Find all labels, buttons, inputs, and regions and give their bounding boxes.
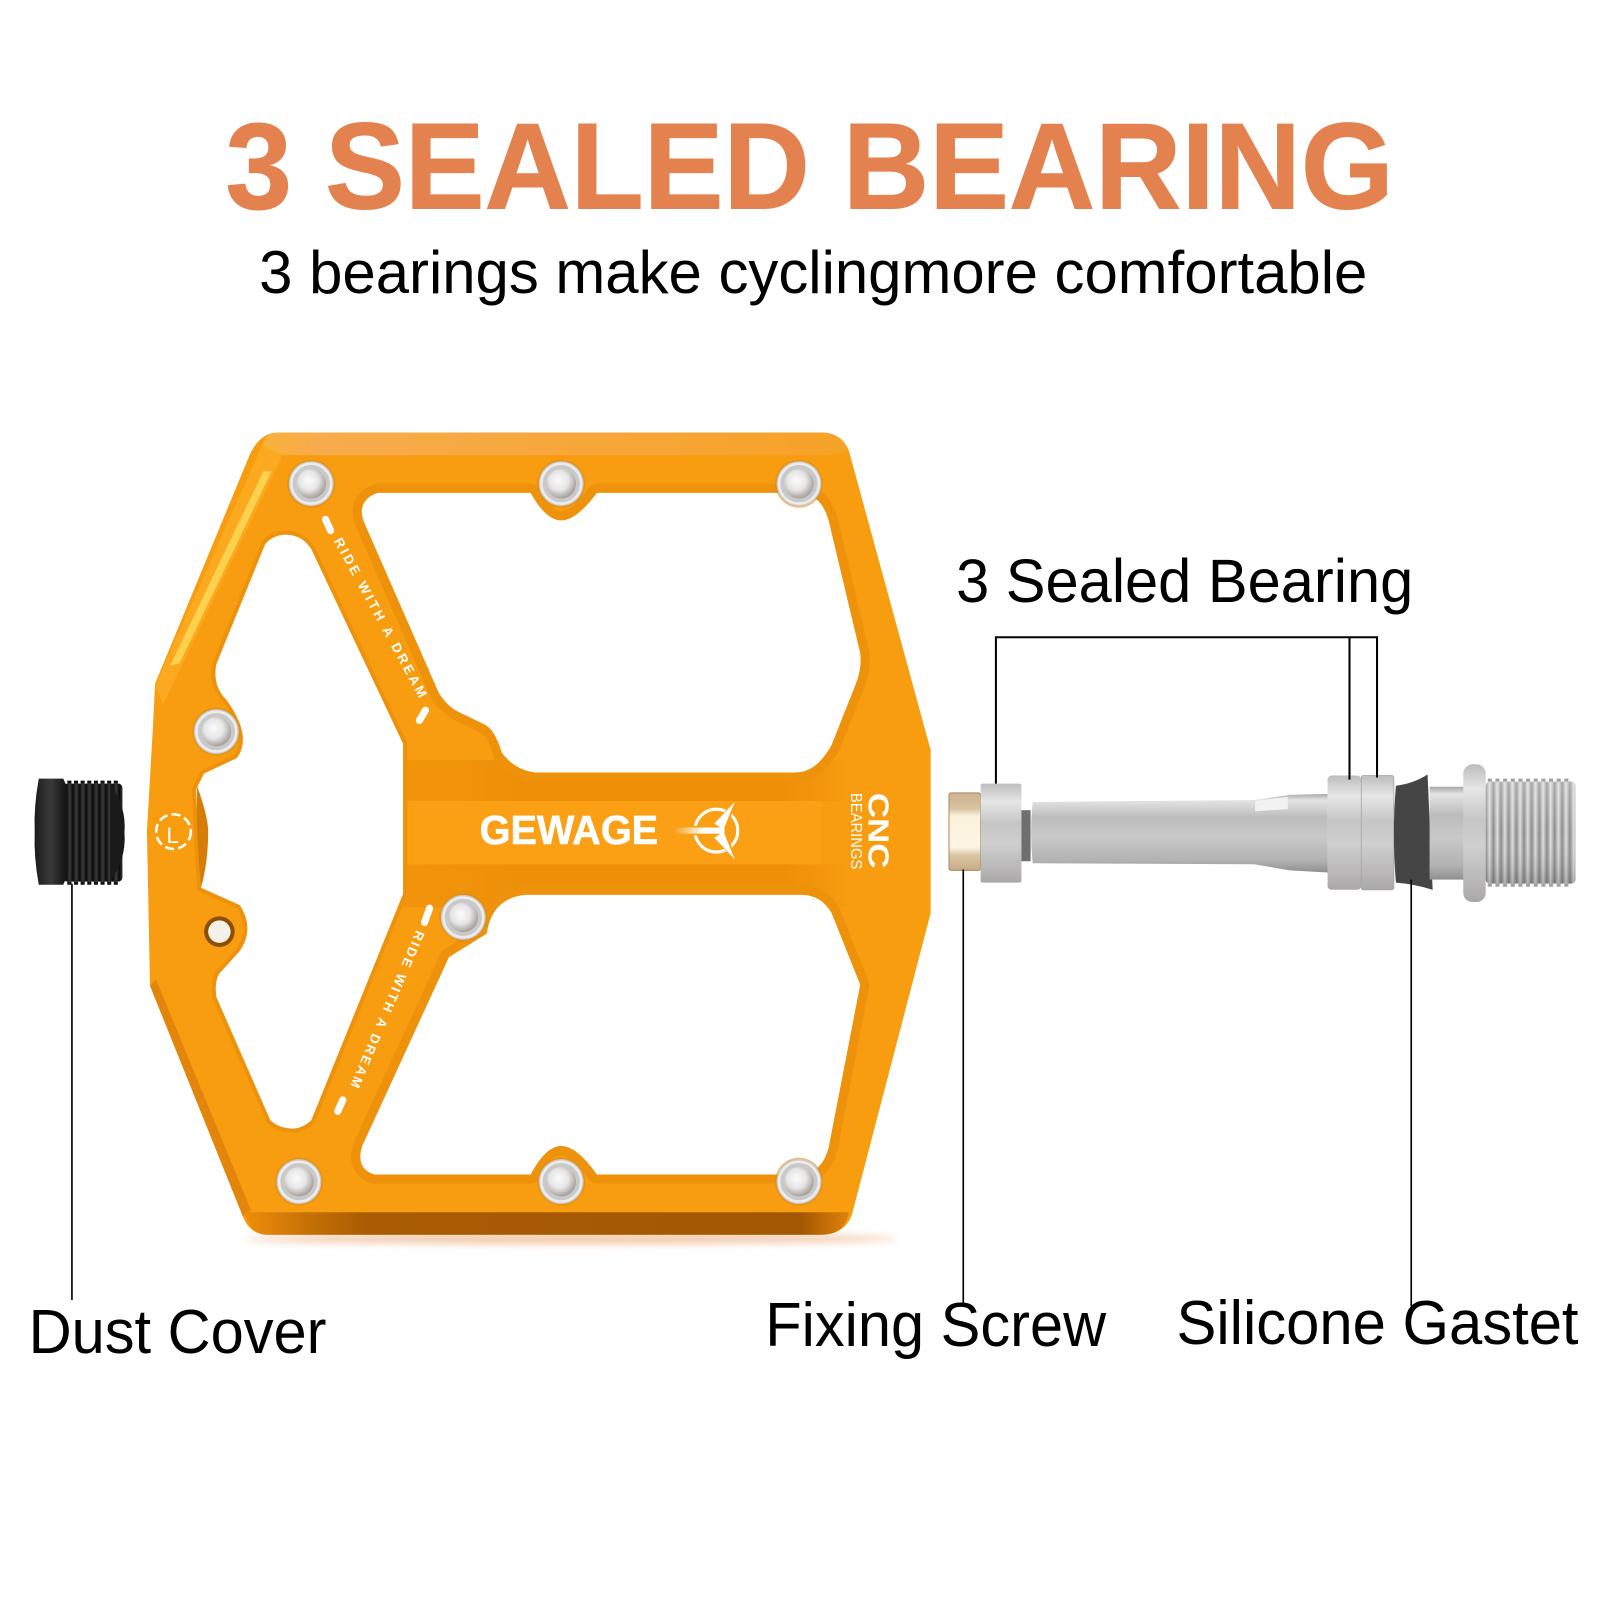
bearing three — [1361, 776, 1394, 890]
lower arm engraving: RIDE WITH A DREAM — [347, 928, 427, 1090]
upper arm engraving: RIDE WITH A DREAM — [331, 535, 430, 700]
mounting bolts — [192, 460, 823, 1206]
pedal body — [147, 433, 931, 1235]
left bevel strip — [155, 445, 283, 704]
dust cover leader line — [71, 884, 73, 1300]
BEARINGS mark: BEARINGS — [847, 793, 864, 869]
label: 3 sealed bearing: 3 Sealed Bearing — [956, 547, 1413, 615]
bearing bracket lines — [996, 637, 1377, 784]
lower window recess and cutout — [360, 895, 860, 1174]
logo plate — [400, 801, 821, 864]
L side mark: L — [166, 823, 179, 848]
bottom bevel — [245, 1212, 849, 1235]
pedal drop shadow — [245, 1234, 898, 1244]
CNC mark: CNC — [861, 793, 893, 868]
fixing screw leader line — [962, 869, 964, 1304]
cover thread teeth — [67, 782, 118, 883]
dust cover — [35, 779, 125, 885]
shaft highlight — [1255, 797, 1288, 811]
axle collar — [1430, 787, 1465, 880]
lower arm engraving — [338, 908, 430, 1111]
left window recess and cutout — [196, 535, 403, 1129]
cover head — [35, 779, 67, 885]
brand name: GEWAGE — [480, 807, 658, 853]
upper window recess and cutout — [362, 493, 861, 772]
bearing one — [981, 784, 1021, 883]
label: fixing screw: Fixing Screw — [765, 1291, 1107, 1360]
silicone gasket — [1394, 774, 1433, 890]
label: dust cover: Dust Cover — [29, 1298, 327, 1367]
slot beside pedal axle bore — [197, 786, 208, 888]
silicone gasket leader line — [1410, 880, 1412, 1306]
cover end shade — [110, 784, 125, 882]
subtitle: 3 bearings make cyclingmore comfortable — [259, 239, 1367, 306]
small pin hole — [204, 916, 235, 947]
L side mark — [156, 814, 191, 849]
lower left bevel — [150, 980, 251, 1216]
title: 3 SEALED BEARING — [226, 98, 1394, 235]
label: silicone gasket: Silicone Gastet — [1177, 1289, 1579, 1358]
cover threads — [63, 784, 122, 882]
axle shaft — [1031, 794, 1328, 872]
brand logo icon — [673, 802, 738, 859]
pedal frame — [147, 433, 931, 1235]
top bevel — [260, 433, 849, 455]
left highlight sliver — [170, 471, 271, 665]
bearing two — [1328, 776, 1361, 890]
axle neck — [1021, 810, 1031, 861]
pedal axle — [949, 764, 1576, 902]
axle flange — [1463, 764, 1486, 902]
lower centre bar shading — [403, 864, 852, 907]
axle thread — [1486, 780, 1576, 885]
fixing nut — [949, 793, 981, 870]
upper centre bar shading — [403, 760, 852, 801]
